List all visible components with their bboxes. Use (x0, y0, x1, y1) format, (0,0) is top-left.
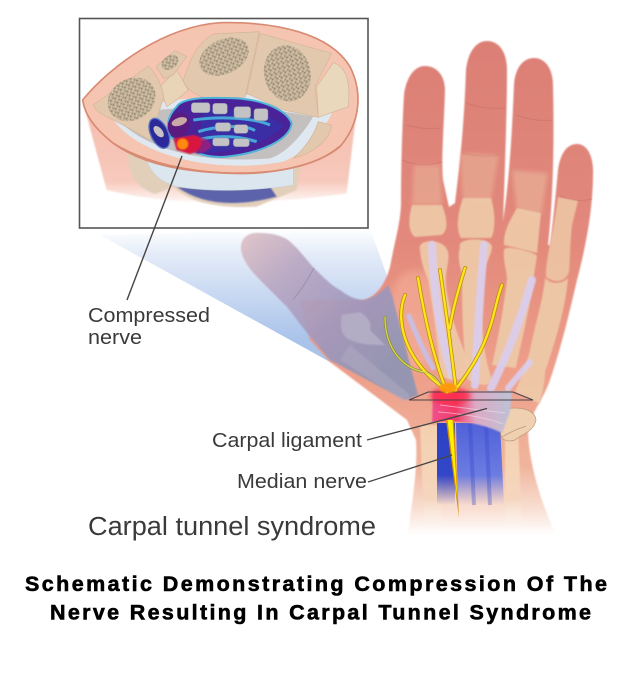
caption line 2: Nerve Resulting In Carpal Tunnel Syndrome (50, 600, 591, 624)
median nerve branches (385, 268, 502, 392)
forearm bones (420, 425, 522, 525)
flexor tendons: blue (437, 423, 504, 505)
inset panel (80, 18, 368, 228)
thumb bone joints (340, 312, 410, 402)
label: compressed nerve: Compressed (88, 305, 210, 327)
carpal bones: right side (499, 408, 536, 441)
leader line: carpal ligament (367, 408, 487, 440)
nerve convergence glow (439, 383, 457, 393)
bones (93, 32, 349, 158)
hand skin silhouette (300, 41, 593, 535)
bone: right (317, 63, 349, 117)
bone: small (156, 51, 187, 79)
carpal tunnel blue sheath (168, 98, 292, 157)
magenta tint by nerve (188, 137, 212, 153)
bones: fingers and metacarpals (409, 153, 578, 404)
palm warm tint (387, 270, 443, 370)
illustration: hand (241, 41, 593, 535)
leader line: median nerve (368, 455, 452, 482)
bone: left (93, 66, 164, 140)
leader line: compressed nerve (127, 156, 182, 300)
label: median nerve: Median nerve (237, 471, 367, 493)
purple tendons (409, 245, 532, 388)
heading: carpal tunnel syndrome: Carpal tunnel syndrome (88, 513, 376, 541)
thumb crease (293, 268, 314, 300)
bone: connector (160, 70, 188, 107)
top ellipse of wrist (83, 23, 358, 174)
caption line 1: Schematic Demonstrating Compression Of The (25, 572, 607, 596)
red carpal compression band (432, 391, 512, 433)
inset top ellipse front rim (113, 143, 340, 173)
tendons: grey cylinders (191, 103, 268, 147)
label: carpal ligament: Carpal ligament (212, 430, 362, 452)
inset drawing (83, 23, 358, 207)
bone: lower right (293, 122, 332, 158)
band streaks (438, 405, 505, 424)
bone: center (183, 32, 259, 97)
highlight wedge from inset to wrist (100, 228, 420, 395)
median nerve main trunk (446, 420, 459, 518)
bone: large right (247, 33, 332, 117)
thumb translucent overlay (241, 233, 418, 400)
red glow (430, 387, 470, 405)
ligament outline (409, 392, 533, 400)
label: nerve: nerve (88, 327, 142, 349)
small tendon sheaths (145, 115, 174, 151)
finger creases (402, 103, 592, 200)
inner tissue (113, 93, 333, 166)
compressed nerve: red glow (173, 135, 202, 154)
spongy bone cores (100, 30, 316, 130)
arm body (83, 97, 358, 203)
caption (25, 572, 607, 624)
ligament and tissue under ellipse (128, 150, 300, 207)
